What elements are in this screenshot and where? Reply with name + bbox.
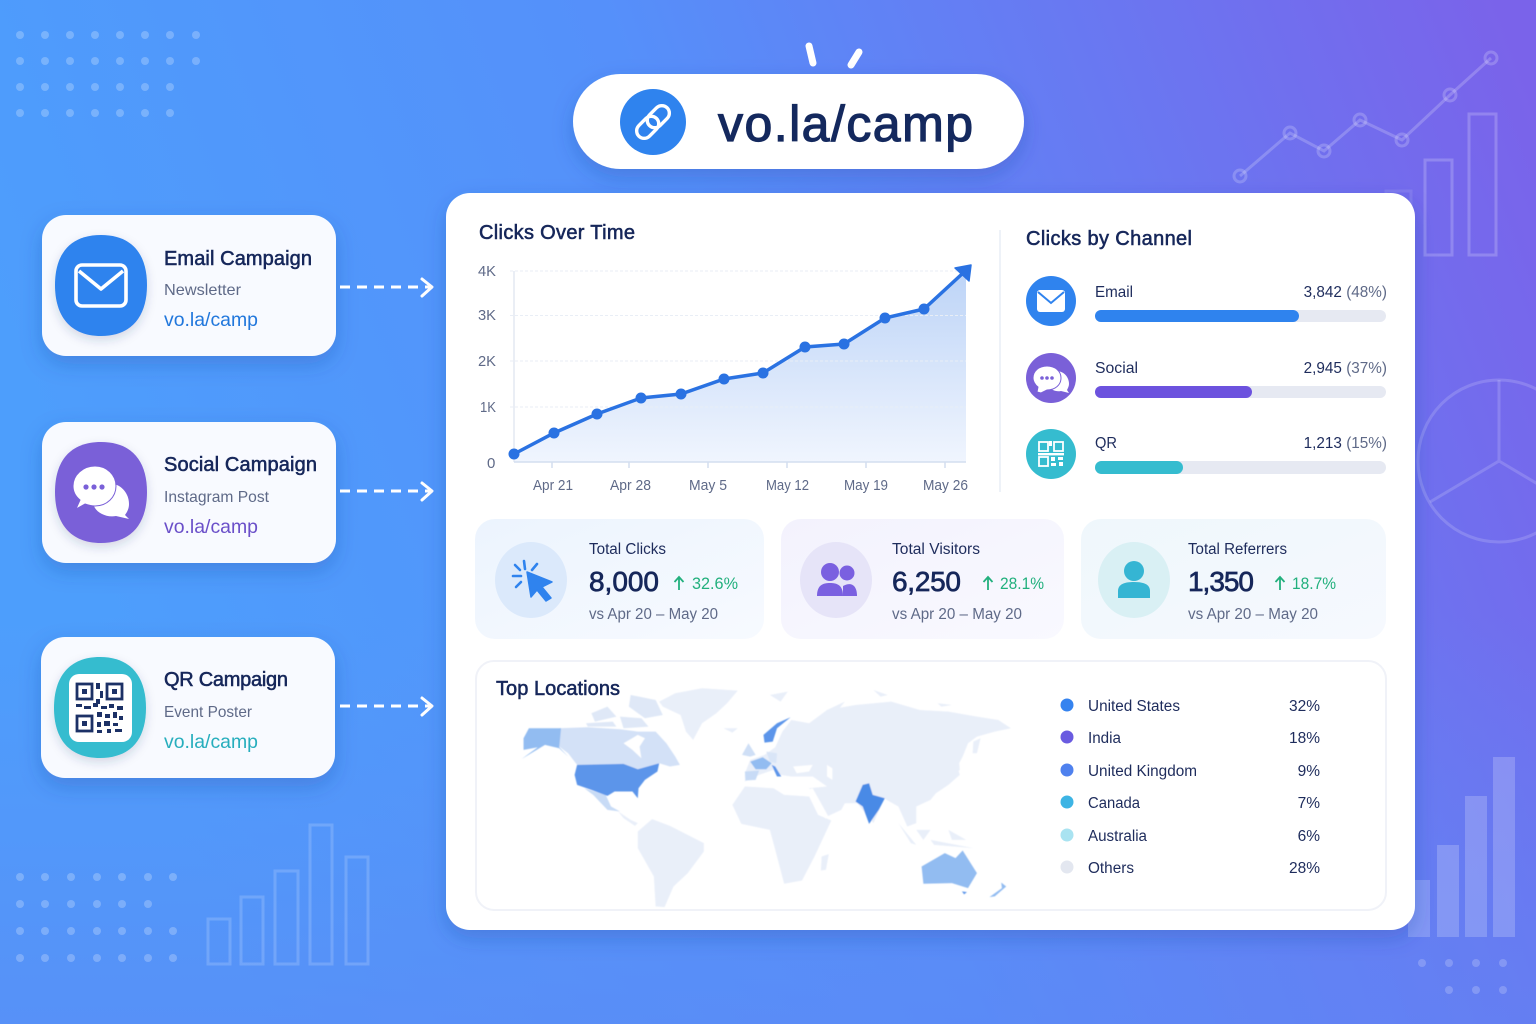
arrow: QR to dashboard	[340, 698, 432, 715]
icon: up arrow	[984, 577, 992, 590]
heading: clicks over time: Clicks Over Time	[479, 222, 635, 244]
total clicks values	[589, 541, 738, 623]
channel row: QR: QR	[1095, 435, 1117, 452]
total visitors values: Total Visitors	[892, 541, 980, 558]
map highlight: central Europe	[766, 752, 777, 763]
total referrers values: 1,350	[1188, 566, 1254, 597]
campaign card: QR	[41, 637, 335, 778]
decoration: top-left dot grid	[16, 31, 200, 117]
location legend: Australia	[1088, 828, 1147, 845]
QR campaign text: vo.la/camp	[164, 731, 258, 753]
location legend: Canada	[1088, 795, 1140, 812]
icon: cursor click	[495, 542, 567, 618]
channel row: social: Social	[1095, 360, 1138, 377]
map highlight: Australia	[922, 850, 977, 888]
short link pill	[573, 74, 1024, 169]
arrow: email to dashboard	[340, 279, 432, 296]
line chart: May 26	[923, 477, 968, 494]
map highlight: New Zealand	[989, 882, 1006, 897]
total visitors values: 28.1%	[1000, 574, 1044, 593]
map highlight: Canada	[559, 727, 680, 769]
social campaign text: vo.la/camp	[164, 516, 258, 538]
channel row: social: 2,945 (37%)	[1304, 360, 1387, 377]
short link text: vo.la/camp	[718, 96, 973, 152]
email campaign text	[164, 248, 312, 331]
decoration: bottom-right dot grid	[1418, 959, 1507, 994]
heading: top locations: Top Locations	[496, 678, 620, 700]
icon: chat bubbles	[55, 442, 147, 543]
line chart: Apr 21	[533, 477, 573, 494]
stat card: total clicks	[475, 519, 764, 639]
icon: envelope	[55, 235, 147, 336]
map highlight: UK	[742, 743, 756, 757]
map highlight: India	[856, 783, 885, 824]
campaign card: email	[42, 215, 336, 356]
panel: clicks over time	[478, 222, 971, 494]
social campaign text	[164, 454, 317, 538]
line chart: May 19	[844, 477, 888, 494]
decoration: bottom-right filled bars	[1408, 757, 1515, 937]
location legend: 9%	[1298, 763, 1320, 780]
location legend: 32%	[1289, 698, 1320, 715]
total referrers values: vs Apr 20 – May 20	[1188, 606, 1318, 623]
total clicks values: 8,000	[589, 566, 659, 597]
location legend: United States	[1088, 698, 1180, 715]
location legend: 28%	[1289, 860, 1320, 877]
decoration: bottom-left outlined bars	[208, 825, 368, 964]
QR campaign text	[164, 669, 288, 753]
social campaign text: Social Campaign	[164, 454, 317, 476]
location legend	[1060, 698, 1320, 877]
panel: top locations	[476, 661, 1386, 910]
total clicks values: vs Apr 20 – May 20	[589, 606, 718, 623]
location legend: Others	[1088, 860, 1134, 877]
world map	[522, 688, 1011, 907]
decoration: bottom-left dot grid	[16, 873, 177, 962]
total visitors values: 6,250	[892, 566, 961, 597]
decoration: top-right line chart and bars	[1234, 52, 1497, 255]
total clicks values: Total Clicks	[589, 541, 666, 558]
email campaign text: Newsletter	[164, 282, 242, 299]
channel row: QR	[1026, 429, 1387, 479]
sparkle marks above link pill	[809, 46, 859, 65]
icon: up arrow	[674, 577, 684, 590]
QR campaign text: QR Campaign	[164, 669, 288, 691]
icon: QR code	[54, 657, 146, 758]
location legend: United Kingdom	[1088, 763, 1197, 780]
location legend: 7%	[1298, 795, 1320, 812]
decoration: right pie outline	[1418, 380, 1536, 542]
social campaign text: Instagram Post	[164, 489, 270, 506]
total visitors values: vs Apr 20 – May 20	[892, 606, 1022, 623]
total referrers values: 18.7%	[1292, 574, 1336, 593]
line chart	[478, 263, 971, 494]
heading: clicks by channel: Clicks by Channel	[1026, 228, 1192, 250]
arrow: social to dashboard	[340, 483, 432, 500]
line chart: 3K	[478, 307, 496, 324]
line chart: 4K	[478, 263, 496, 280]
panel: clicks by channel	[1026, 228, 1387, 479]
dashboard panel	[446, 193, 1415, 930]
channel row: email	[1026, 276, 1387, 326]
stat card: total referrers	[1081, 519, 1386, 639]
line chart: May 5	[689, 477, 727, 494]
icon: up arrow	[1276, 577, 1284, 590]
map highlight: USA	[575, 763, 659, 798]
icon: chain link	[620, 89, 686, 155]
map highlight: France and Spain	[750, 757, 772, 769]
line chart: 0	[487, 455, 495, 472]
stat card: total visitors	[781, 519, 1064, 639]
total visitors values	[892, 541, 1044, 623]
channel row: QR: 1,213 (15%)	[1304, 435, 1387, 452]
map highlight: Alaska	[522, 728, 568, 759]
icon: people	[800, 542, 872, 618]
email campaign text: vo.la/camp	[164, 309, 258, 331]
map highlight: Arctic Canada	[586, 695, 663, 728]
total referrers values: Total Referrers	[1188, 541, 1287, 558]
icon: person	[1098, 542, 1170, 618]
line chart: 1K	[480, 399, 496, 416]
line chart: Apr 28	[610, 477, 651, 494]
email campaign text: Email Campaign	[164, 248, 312, 270]
map highlight: Italy	[772, 765, 781, 777]
location legend: India	[1088, 730, 1121, 747]
total referrers values	[1188, 541, 1336, 623]
QR campaign text: Event Poster	[164, 704, 253, 721]
location legend: 18%	[1289, 730, 1320, 747]
channel row: email: Email	[1095, 284, 1133, 301]
map highlight: Mexico	[584, 788, 620, 812]
location legend: 6%	[1298, 828, 1320, 845]
line chart: May 12	[766, 477, 809, 494]
line chart: 2K	[478, 353, 496, 370]
map highlight: Norway	[763, 717, 791, 743]
channel row: email: 3,842 (48%)	[1304, 284, 1387, 301]
total clicks values: 32.6%	[692, 574, 738, 593]
channel row: social	[1026, 353, 1387, 403]
campaign card: social	[42, 422, 336, 563]
